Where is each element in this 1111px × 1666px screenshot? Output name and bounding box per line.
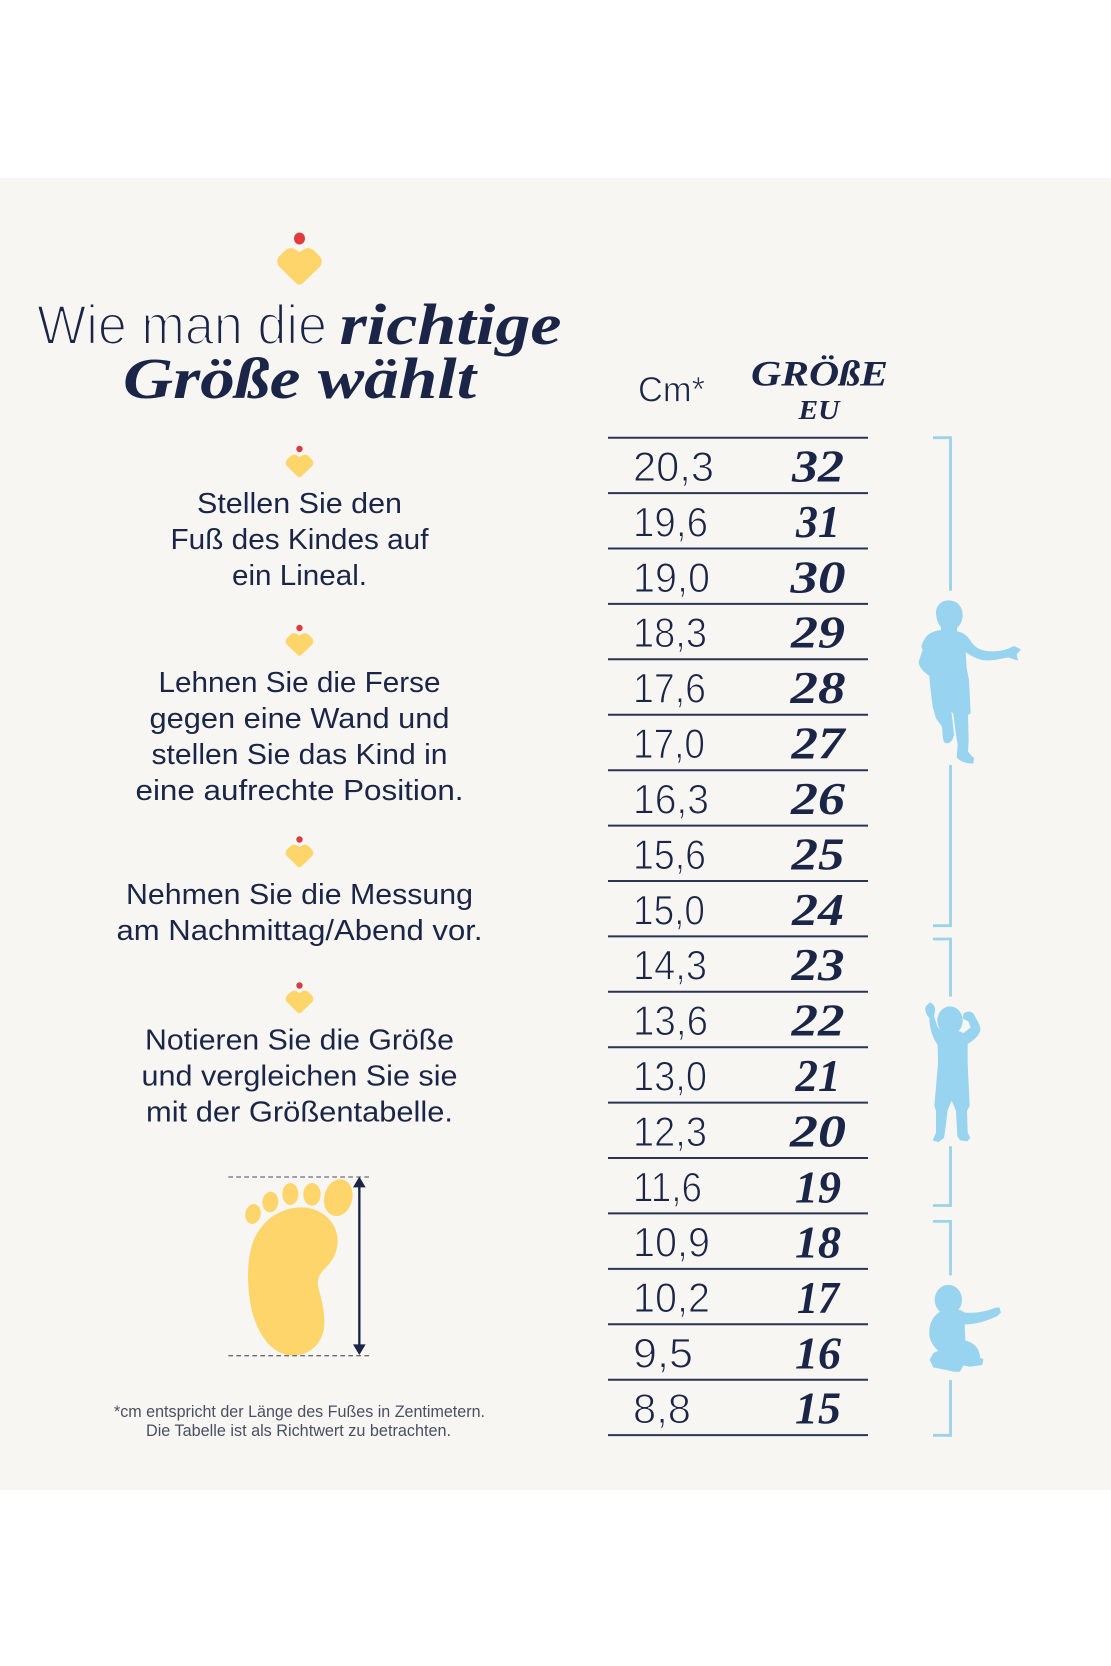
row: 19,6 cm size 31: 31 (795, 496, 840, 547)
row: 19,0 cm size 30 (633, 551, 846, 602)
icon: foot with measuring arrow (228, 1176, 371, 1356)
row: 19,6 cm size 31: 19,6 (633, 498, 708, 545)
row: 10,9 cm size 18: 10,9 (633, 1219, 710, 1266)
step 4 instruction (142, 982, 458, 1128)
row: 18,3 cm size 29 (633, 607, 845, 658)
step 1 instruction: Fuß des Kindes auf (170, 524, 429, 556)
footnote: *cm entspricht der Länge des Fußes in Zentimetern. (114, 1402, 485, 1421)
row: 11,6 cm size 19 (633, 1161, 841, 1212)
bracket: toddler sizes 19-23 (933, 939, 950, 1206)
row: 17,6 cm size 28: 17,6 (633, 665, 706, 712)
row: 16,3 cm size 26: 16,3 (633, 776, 709, 822)
step 1 instruction (170, 446, 429, 592)
row: 12,3 cm size 20: 12,3 (633, 1108, 707, 1155)
step 3 instruction (116, 836, 482, 947)
row: 11,6 cm size 19: 11,6 (633, 1163, 702, 1210)
row: 13,0 cm size 21: 13,0 (633, 1052, 707, 1100)
row: 12,3 cm size 20 (633, 1105, 846, 1156)
row: 17,0 cm size 27 (633, 718, 847, 769)
panel: background (0, 178, 1111, 1490)
row: 20,3 cm size 32: 20,3 (633, 443, 714, 490)
step 1 instruction: Stellen Sie den (197, 488, 402, 520)
step 2 instruction (136, 625, 464, 807)
step 1 instruction: ein Lineal. (232, 560, 367, 592)
row: 10,2 cm size 17 (633, 1272, 841, 1323)
row: 19,0 cm size 30: 30 (789, 551, 846, 602)
bracket: baby sizes 15-18 (933, 1221, 950, 1435)
row: 13,0 cm size 21: 21 (795, 1050, 840, 1101)
row: 10,9 cm size 18: 18 (795, 1217, 841, 1268)
row: 9,5 cm size 16: 16 (795, 1328, 841, 1379)
row: 19,6 cm size 31 (633, 496, 840, 547)
row: 17,6 cm size 28: 28 (789, 662, 846, 713)
row: 13,6 cm size 22: 13,6 (633, 997, 708, 1044)
row: 15,6 cm size 25: 15,6 (633, 831, 706, 878)
row: 18,3 cm size 29: 29 (790, 607, 845, 658)
row: 19,0 cm size 30: 19,0 (633, 554, 710, 601)
title: Größe wählt (123, 346, 478, 411)
step 3 instruction: Nehmen Sie die Messung (126, 879, 473, 911)
row: 8,8 cm size 15 (633, 1382, 841, 1434)
row: 8,8 cm size 15: 15 (795, 1382, 841, 1434)
icon: sitting baby silhouette (929, 1285, 1001, 1372)
row: 9,5 cm size 16: 9,5 (633, 1330, 693, 1377)
row: 8,8 cm size 15: 8,8 (633, 1385, 691, 1432)
step 4 instruction: mit der Größentabelle. (146, 1096, 453, 1128)
row: 13,0 cm size 21 (633, 1050, 840, 1101)
row: 20,3 cm size 32: 32 (791, 440, 844, 492)
row: 13,6 cm size 22: 22 (790, 995, 844, 1046)
table header: Größe EU: GRÖßE (751, 354, 888, 394)
step 2 instruction: stellen Sie das Kind in (152, 739, 448, 771)
row: 15,6 cm size 25: 25 (790, 828, 844, 879)
row: 17,0 cm size 27: 17,0 (633, 720, 705, 767)
row: 16,3 cm size 26 (633, 773, 845, 824)
row: 15,0 cm size 24: 15,0 (633, 886, 705, 933)
row: 15,0 cm size 24: 24 (791, 884, 844, 935)
step 2 instruction: eine aufrechte Position. (136, 775, 464, 807)
row: 17,6 cm size 28 (633, 662, 846, 713)
row: 14,3 cm size 23: 23 (790, 939, 844, 990)
step 4 instruction: Notieren Sie die Größe (145, 1024, 454, 1056)
size table (608, 438, 868, 1435)
step 4 instruction: und vergleichen Sie sie (142, 1060, 458, 1092)
row: 15,6 cm size 25 (633, 828, 844, 879)
footnote (114, 1402, 485, 1440)
step 3 instruction: am Nachmittag/Abend vor. (116, 915, 482, 947)
row: 12,3 cm size 20: 20 (789, 1105, 846, 1156)
table header: Cm: Cm* (638, 370, 705, 410)
icon: running child silhouette (919, 600, 1021, 764)
table header: Größe EU (751, 354, 888, 425)
row: 14,3 cm size 23: 14,3 (633, 942, 707, 989)
row: 14,3 cm size 23 (633, 939, 844, 990)
icon: standing toddler silhouette (925, 1002, 980, 1142)
table header: Größe EU: EU (797, 395, 841, 425)
row: 10,2 cm size 17: 17 (797, 1272, 841, 1323)
row: 13,6 cm size 22 (633, 995, 844, 1046)
row: 10,9 cm size 18 (633, 1217, 841, 1268)
row: 9,5 cm size 16 (633, 1328, 841, 1379)
icon: logo heart with dot (277, 232, 322, 285)
title: Wie man die (37, 293, 327, 356)
bracket: child sizes 24-32 (933, 438, 950, 926)
row: 17,0 cm size 27: 27 (790, 718, 847, 769)
row: 16,3 cm size 26: 26 (790, 773, 845, 824)
row: 10,2 cm size 17: 10,2 (633, 1274, 710, 1321)
row: 11,6 cm size 19: 19 (795, 1161, 841, 1212)
title: richtige (340, 292, 562, 357)
step 2 instruction: gegen eine Wand und (150, 703, 450, 735)
footnote: Die Tabelle ist als Richtwert zu betrachten. (146, 1421, 451, 1440)
title (37, 292, 562, 411)
row: 18,3 cm size 29: 18,3 (633, 609, 707, 656)
step 2 instruction: Lehnen Sie die Ferse (158, 667, 440, 699)
row: 20,3 cm size 32 (633, 440, 844, 492)
row: 15,0 cm size 24 (633, 884, 844, 935)
